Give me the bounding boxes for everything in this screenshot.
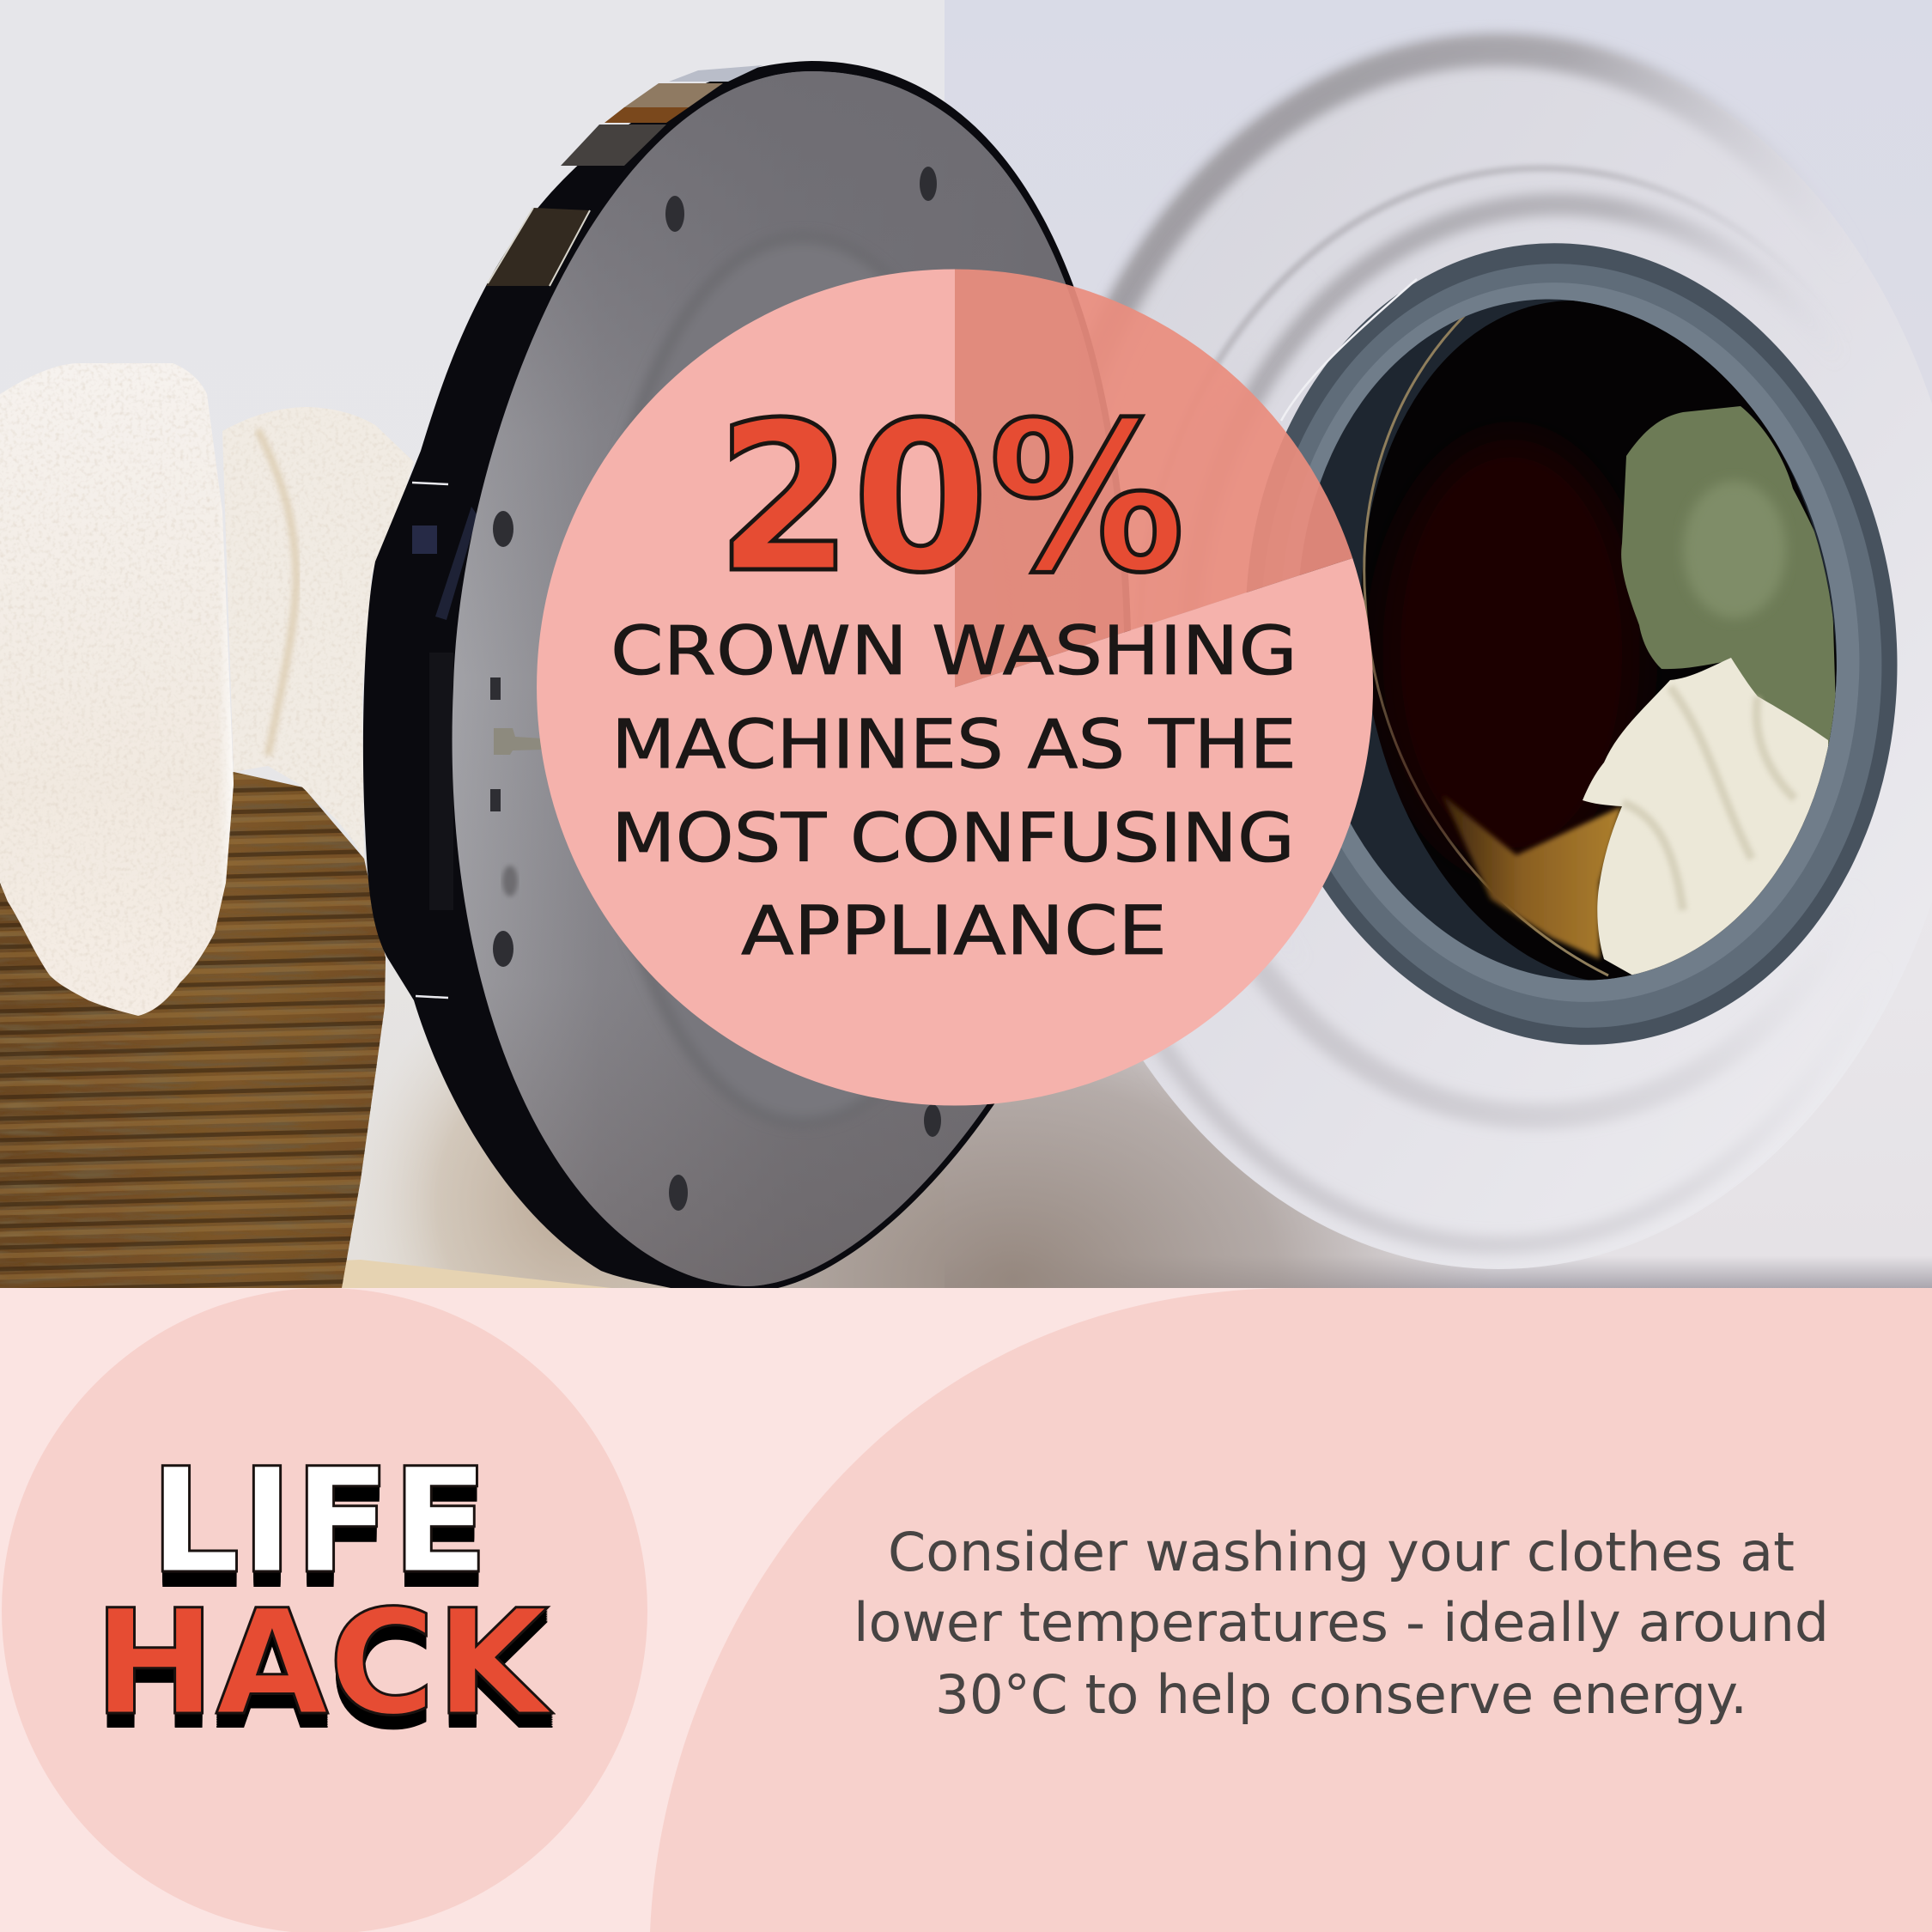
towel back fold <box>222 407 414 859</box>
shelf <box>341 1260 611 1288</box>
door latch <box>494 728 543 755</box>
gasket chrome edge <box>1281 279 1417 421</box>
statistic: 20%: 20% <box>716 378 1185 618</box>
statistic caption: MACHINES AS THE <box>611 707 1297 784</box>
rubber door gasket <box>1200 205 1932 1083</box>
heading: life hack <box>94 1437 556 1747</box>
drum interior <box>1362 301 1837 981</box>
statistic caption <box>611 613 1297 970</box>
shadow below the door <box>352 962 781 1443</box>
bottom panel background <box>2 1288 1932 1932</box>
machine door surround rings <box>1024 36 1932 1269</box>
basket rope bands <box>0 772 386 1288</box>
towel front drape <box>0 363 234 1016</box>
yellow garment <box>1443 795 1622 959</box>
statistic caption: CROWN WASHING <box>611 613 1297 690</box>
stat circle with 20 percent pie slice <box>537 270 1374 1106</box>
door grey inner plate <box>453 71 1125 1286</box>
towel fold crease <box>258 429 296 756</box>
pie remainder <box>537 270 1373 1106</box>
towel bright edge <box>172 363 234 982</box>
laundry basket <box>0 772 386 1288</box>
tip text: 30°C to help conserve energy. <box>935 1663 1747 1726</box>
heading: life hack: HACK <box>94 1578 549 1747</box>
statistic caption: APPLIANCE <box>741 893 1167 970</box>
drum rim <box>1364 307 1608 975</box>
20 percent pie slice <box>955 269 1352 687</box>
heading: life hack: LIFE <box>149 1437 489 1606</box>
door rim glossy highlights <box>412 65 762 998</box>
life hack circle <box>2 1288 647 1932</box>
washing machine front panel <box>532 0 1932 1640</box>
white knitted garment <box>1583 658 1828 979</box>
screw holes <box>490 167 941 1211</box>
dark red garment <box>1382 438 1640 867</box>
door outer black rim <box>363 61 1132 1292</box>
tip text: Consider washing your clothes at <box>888 1521 1795 1583</box>
wall <box>0 0 946 1288</box>
raised dome on plate <box>627 283 855 1111</box>
tip curved panel <box>650 1288 1932 1932</box>
photo: laundry basket and open washing machine <box>0 0 1932 1288</box>
tip text <box>854 1521 1829 1726</box>
tip text: lower temperatures - ideally around <box>854 1591 1829 1654</box>
green garment <box>1621 406 1838 764</box>
statistic caption: MOST CONFUSING <box>611 800 1295 878</box>
